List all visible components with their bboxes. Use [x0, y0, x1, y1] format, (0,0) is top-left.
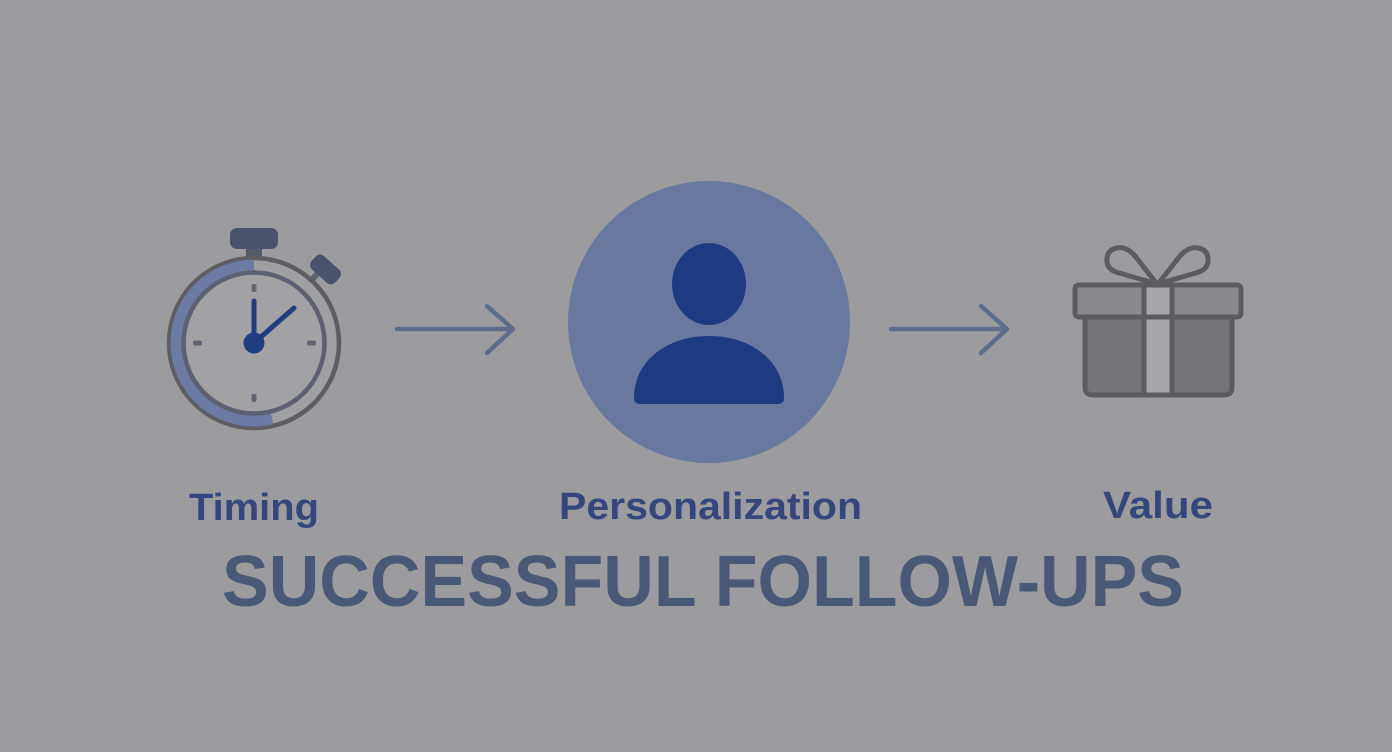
title: SUCCESSFUL FOLLOW-UPS	[222, 542, 1184, 622]
icon: stopwatch	[169, 228, 343, 428]
arrow: personalization to value	[891, 306, 1007, 353]
label: Value: Value	[1103, 485, 1213, 527]
icon: gift box	[1075, 248, 1241, 395]
arrow: timing to personalization	[397, 306, 513, 353]
label: Personalization: Personalization	[559, 486, 862, 528]
label: Timing: Timing	[189, 487, 319, 529]
icon: personalization circle with person	[568, 181, 850, 463]
